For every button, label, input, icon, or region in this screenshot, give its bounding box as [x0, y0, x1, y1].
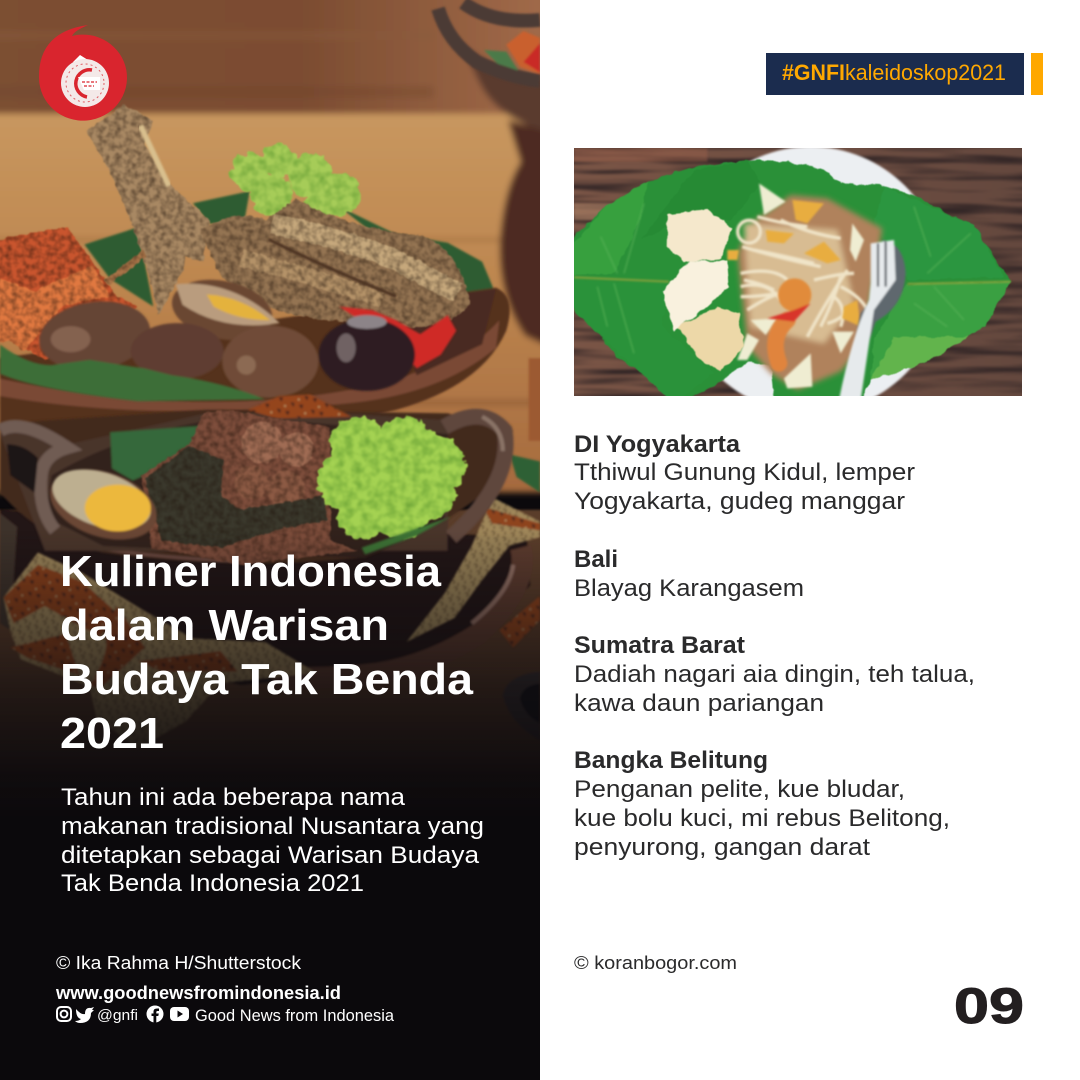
region: Bangka Belitung: kue bolu kuci, mi rebus Belitong, [574, 805, 950, 832]
wood below right [528, 358, 540, 442]
intro text: makanan tradisional Nusantara yang [61, 813, 484, 840]
red chili [339, 307, 456, 369]
region: Sumatra Barat: kawa daun pariangan [574, 690, 824, 717]
hashtag badge: kaleidoskop2021 [845, 60, 1006, 85]
front egg [49, 469, 158, 541]
photo credit: © Ika Rahma H/Shutterstock [56, 953, 302, 973]
roasted meat [200, 199, 470, 328]
logo [39, 25, 127, 121]
accent bar [1031, 53, 1043, 95]
dark gradient [0, 530, 540, 820]
social name: Good News from Indonesia [195, 1006, 395, 1025]
batik edge [248, 394, 351, 418]
title: Kuliner Indonesia [60, 547, 442, 596]
shrimp [778, 278, 811, 312]
region: DI Yogyakarta: Tthiwul Gunung Kidul, lemper [574, 459, 915, 486]
eggs [38, 300, 151, 365]
front lettuce [317, 416, 466, 540]
back lettuce [231, 143, 361, 219]
region: Bali: Blayag Karangasem [574, 575, 804, 602]
social handle: @gnfi [97, 1007, 138, 1024]
second bowl interior [0, 510, 530, 685]
title [60, 547, 474, 758]
bowl interior [45, 417, 448, 558]
panel: food photo [0, 0, 554, 1080]
tofu pieces [727, 200, 861, 327]
second bowl rim [272, 548, 522, 678]
table under lower setting [0, 508, 540, 759]
front leaf [0, 344, 265, 401]
region: Bangka Belitung: Bangka Belitung [574, 747, 768, 774]
icon: twitter [75, 1007, 94, 1023]
region: Sumatra Barat: Dadiah nagari aia dingin, teh talua, [574, 661, 975, 688]
small dish [505, 673, 539, 695]
region: Sumatra Barat: Sumatra Barat [574, 632, 745, 659]
egg wedges [737, 183, 864, 388]
icon: youtube [170, 1007, 189, 1021]
main bowl [0, 288, 510, 444]
batik cloth [3, 497, 540, 749]
region: Bangka Belitung: Penganan pelite, kue bludar, [574, 776, 905, 803]
back leaves [84, 191, 497, 351]
icon: instagram [57, 1007, 71, 1021]
intro text: Tahun ini ada beberapa nama [61, 784, 406, 811]
red sambal goreng [0, 227, 138, 360]
title: Budaya Tak Benda [60, 655, 474, 704]
title: dalam Warisan [60, 601, 389, 650]
hashtag badge: #GNFI [782, 60, 845, 85]
icon: facebook [146, 1006, 164, 1023]
region: Sumatra Barat [574, 632, 975, 717]
region: Bali [574, 546, 804, 602]
intro text: Tak Benda Indonesia 2021 [61, 870, 364, 897]
region: Bali: Bali [574, 546, 618, 573]
drumstick [86, 105, 210, 315]
website: www.goodnewsfromindonesia.id [55, 983, 341, 1003]
gudeg greens [145, 446, 327, 548]
region: Bangka Belitung [574, 747, 950, 861]
wood table [571, 143, 1027, 403]
fork and spoon [856, 240, 906, 338]
panel: dish photo [574, 148, 1022, 396]
half egg [170, 278, 274, 340]
plate [722, 148, 916, 396]
hashtag badge [766, 53, 1024, 95]
page number: 09 [954, 978, 1024, 1034]
intro text: ditetapkan sebagai Warisan Budaya [61, 842, 480, 869]
region: Bangka Belitung: penyurong, gangan darat [574, 834, 870, 861]
top right bowl [438, 3, 540, 81]
banana leaf [110, 425, 210, 480]
leaf [567, 160, 1011, 403]
crackers [662, 209, 744, 372]
sauce and noodles [737, 195, 882, 390]
gudeg [141, 410, 358, 565]
image source: © koranbogor.com [574, 953, 737, 973]
region: DI Yogyakarta: DI Yogyakarta [574, 431, 741, 458]
region: DI Yogyakarta [574, 431, 915, 515]
region: DI Yogyakarta: Yogyakarta, gudeg manggar [574, 488, 905, 515]
title: 2021 [60, 709, 164, 758]
intro text [61, 784, 484, 897]
lower bowl outside [0, 410, 513, 564]
